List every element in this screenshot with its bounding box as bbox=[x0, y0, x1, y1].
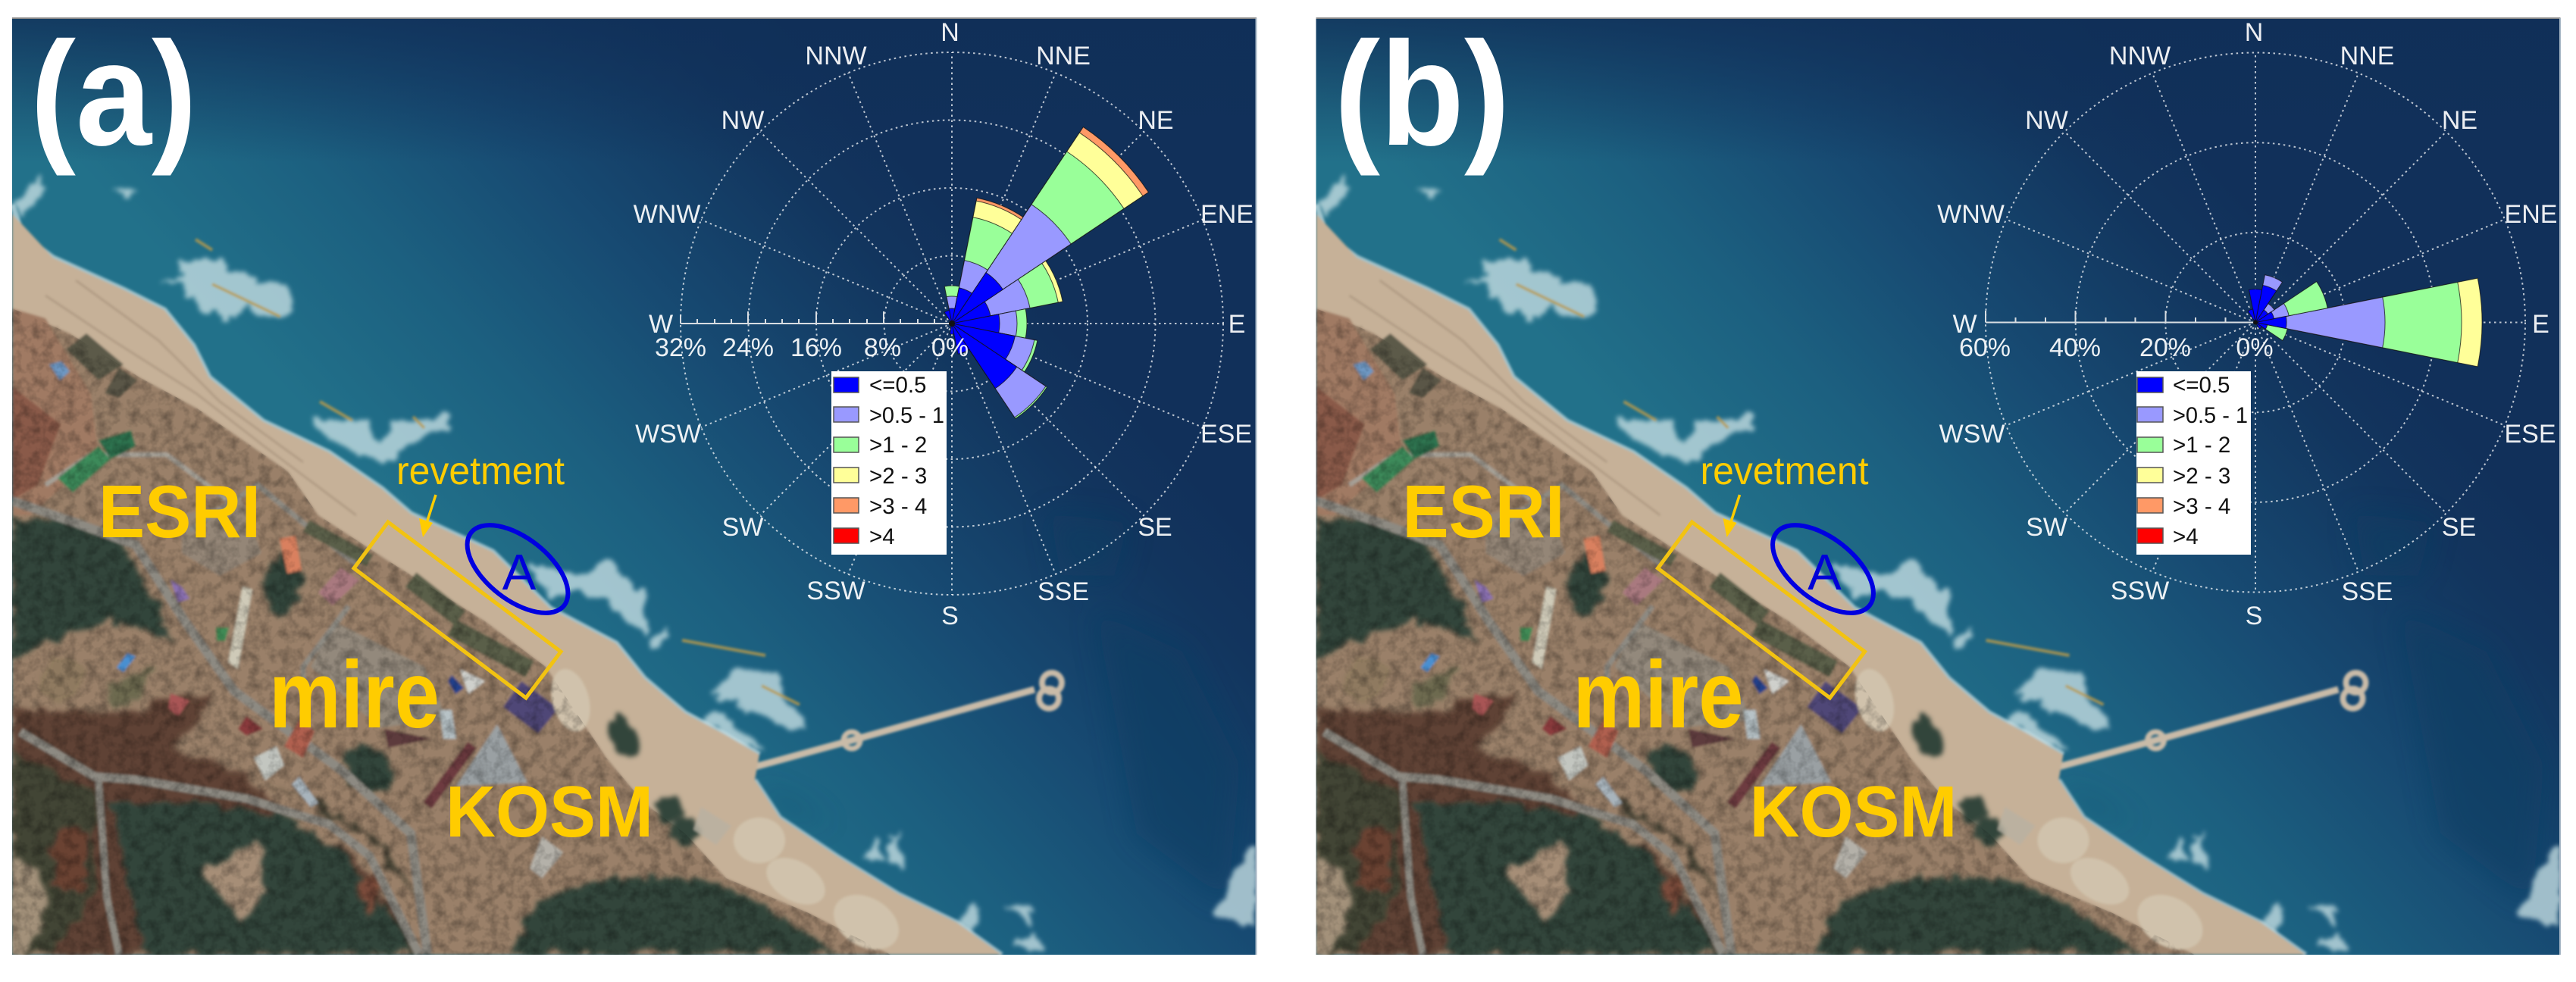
radial percent labels (b) bbox=[1959, 333, 2274, 362]
label: revetment: revetment bbox=[1701, 449, 1869, 493]
direction labels (b): SE bbox=[2442, 513, 2476, 542]
arrow: revetment pointer bbox=[1723, 495, 1740, 537]
wind rose petals (a) bbox=[919, 124, 1152, 421]
wind rose W axis (b) bbox=[1986, 311, 2255, 323]
arrow: revetment pointer bbox=[419, 495, 436, 537]
direction labels (b): N bbox=[2245, 18, 2263, 47]
label: mire: mire bbox=[269, 643, 440, 748]
ellipse: area A bbox=[452, 508, 584, 630]
direction labels (a): WNW bbox=[634, 200, 700, 229]
direction labels (a): NE bbox=[1138, 106, 1174, 135]
radial percent labels (b): 20% bbox=[2139, 333, 2191, 362]
direction labels (a): WSW bbox=[635, 420, 701, 449]
legend (a): >1 - 2 bbox=[869, 433, 927, 458]
radial percent labels (a): 32% bbox=[655, 333, 706, 362]
direction labels (b): ESE bbox=[2504, 420, 2556, 449]
direction labels (b): NNE bbox=[2340, 42, 2394, 70]
radial percent labels (b): 40% bbox=[2049, 333, 2101, 362]
radial percent labels (b): 0% bbox=[2236, 333, 2274, 362]
legend (a): >4 bbox=[869, 524, 895, 549]
direction labels (b): NW bbox=[2025, 106, 2068, 135]
legend (a): >0.5 - 1 bbox=[869, 403, 944, 428]
ellipse: area A: A bbox=[502, 544, 537, 601]
legend (b) bbox=[2136, 371, 2251, 555]
direction labels (a): NW bbox=[721, 106, 764, 135]
legend (a): >3 - 4 bbox=[869, 494, 927, 519]
label: ESRI: ESRI bbox=[1402, 470, 1564, 553]
revetment outline box bbox=[1658, 522, 1864, 698]
radial percent labels (a): 0% bbox=[931, 333, 969, 362]
radial percent labels (a): 16% bbox=[790, 333, 842, 362]
direction labels (b): WSW bbox=[1939, 420, 2005, 449]
direction labels (a): SE bbox=[1138, 513, 1172, 542]
direction labels (a): NNW bbox=[805, 42, 867, 70]
label: revetment: revetment bbox=[396, 449, 565, 493]
direction labels (a): N bbox=[941, 18, 959, 47]
label: ESRI: ESRI bbox=[99, 470, 261, 553]
ellipse: area A bbox=[1758, 508, 1889, 630]
label: KOSM: KOSM bbox=[446, 771, 653, 852]
wind rose grid (b) bbox=[1986, 53, 2525, 593]
wind rose petals (b) bbox=[2246, 274, 2482, 367]
direction labels (a): SW bbox=[722, 513, 763, 542]
label: mire: mire bbox=[1573, 643, 1743, 748]
panel: (a) site map with wind rose bbox=[12, 11, 1257, 961]
wind rose grid (a) bbox=[681, 52, 1223, 595]
direction labels (a): W bbox=[649, 310, 673, 339]
radial percent labels (a): 24% bbox=[722, 333, 774, 362]
legend (b): >2 - 3 bbox=[2173, 464, 2230, 489]
label: KOSM: KOSM bbox=[1749, 771, 1957, 852]
direction labels (a): ESE bbox=[1200, 420, 1252, 449]
legend (b): >0.5 - 1 bbox=[2173, 403, 2248, 428]
direction labels (b): SSW bbox=[2111, 577, 2169, 605]
legend (b): >4 bbox=[2173, 524, 2199, 549]
direction labels (b): SSE bbox=[2341, 577, 2393, 606]
revetment outline box bbox=[354, 522, 561, 698]
direction labels (b): E bbox=[2532, 310, 2549, 339]
direction labels (a): SSE bbox=[1038, 577, 1089, 606]
legend (b): >1 - 2 bbox=[2173, 433, 2230, 458]
legend (a) bbox=[831, 371, 947, 555]
direction labels (a): E bbox=[1229, 310, 1245, 339]
radial percent labels (a) bbox=[655, 333, 969, 362]
direction labels (a): S bbox=[941, 602, 959, 630]
direction labels (b): WNW bbox=[1937, 200, 2005, 229]
direction labels (b): W bbox=[1952, 310, 1977, 339]
wind rose W axis (a) bbox=[681, 311, 952, 324]
legend (a): >2 - 3 bbox=[869, 464, 927, 489]
direction labels (b): S bbox=[2246, 602, 2262, 630]
direction labels (a): ENE bbox=[1200, 200, 1254, 229]
direction labels (b) bbox=[1937, 18, 2557, 630]
heading: (a): (a) bbox=[30, 11, 197, 177]
radial percent labels (a): 8% bbox=[864, 333, 901, 362]
direction labels (a): NNE bbox=[1036, 42, 1091, 70]
heading: (b): (b) bbox=[1334, 11, 1510, 177]
direction labels (b): ENE bbox=[2505, 200, 2557, 229]
direction labels (a): SSW bbox=[806, 577, 865, 605]
direction labels (b): SW bbox=[2026, 513, 2067, 542]
radial percent labels (b): 60% bbox=[1959, 333, 2011, 362]
panel: (b) site map with wind rose bbox=[1316, 11, 2561, 961]
direction labels (a) bbox=[634, 18, 1254, 630]
direction labels (b): NE bbox=[2442, 106, 2477, 135]
legend (a): <=0.5 bbox=[869, 373, 926, 398]
direction labels (b): NNW bbox=[2109, 42, 2171, 70]
ellipse: area A: A bbox=[1808, 544, 1842, 601]
legend (b): >3 - 4 bbox=[2173, 494, 2230, 519]
legend (b): <=0.5 bbox=[2173, 373, 2230, 398]
